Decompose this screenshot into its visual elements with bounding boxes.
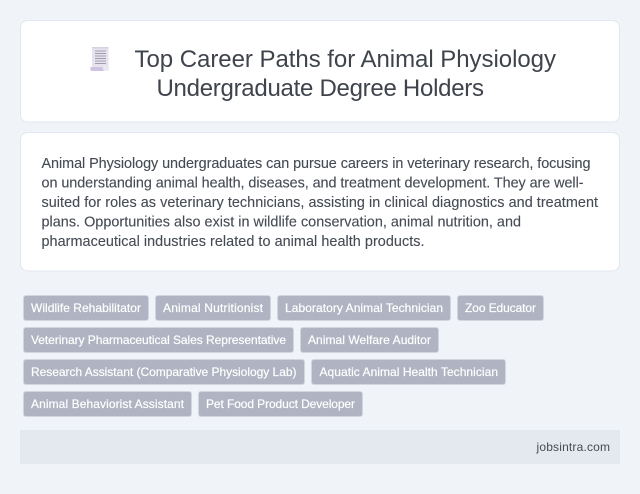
tag: Aquatic Animal Health Technician: Aquatic Animal Health Technician <box>320 365 498 379</box>
tag: Laboratory Animal Technician <box>278 296 450 320</box>
tag: Animal Behaviorist Assistant: Animal Behaviorist Assistant <box>31 397 185 411</box>
tag: Zoo Educator <box>458 296 544 320</box>
description text: suited for roles as veterinary technicians, assisting in clinical diagnostics and treatment <box>42 195 598 211</box>
footer source text: jobsintra.com <box>536 440 610 454</box>
tag: Zoo Educator: Zoo Educator <box>465 301 536 315</box>
tag: Veterinary Pharmaceutical Sales Representative <box>24 328 294 352</box>
header panel <box>20 20 620 122</box>
tag: Wildlife Rehabilitator: Wildlife Rehabilitator <box>31 301 141 315</box>
description text: on understanding animal health, diseases, and treatment development. They are well- <box>42 176 584 192</box>
tag: Research Assistant (Comparative Physiology Lab) <box>24 360 304 384</box>
tag: Veterinary Pharmaceutical Sales Representative: Veterinary Pharmaceutical Sales Representative <box>31 333 286 347</box>
footer bar <box>20 430 620 464</box>
tag: Wildlife Rehabilitator <box>24 296 148 320</box>
tag: Research Assistant (Comparative Physiology Lab): Research Assistant (Comparative Physiology Lab) <box>31 365 296 379</box>
title: Top Career Paths for Animal Physiology <box>134 46 556 73</box>
tag: Pet Food Product Developer <box>198 392 362 416</box>
career tags <box>24 296 544 416</box>
tag: Animal Behaviorist Assistant <box>24 392 192 416</box>
tag: Animal Nutritionist: Animal Nutritionist <box>163 301 264 315</box>
icon: paper scroll document <box>90 47 109 71</box>
tag: Aquatic Animal Health Technician <box>312 360 506 384</box>
description text <box>42 156 598 250</box>
tag: Animal Welfare Auditor <box>300 328 438 352</box>
title <box>134 46 556 102</box>
title: Undergraduate Degree Holders <box>156 75 484 102</box>
tag: Animal Nutritionist <box>156 296 270 320</box>
tag: Animal Welfare Auditor: Animal Welfare Auditor <box>308 333 431 347</box>
description text: plans. Opportunities also exist in wildlife conservation, animal nutrition, and <box>42 215 521 231</box>
description panel <box>20 132 620 271</box>
description text: Animal Physiology undergraduates can pursue careers in veterinary research, focusing <box>42 156 590 172</box>
tag: Laboratory Animal Technician: Laboratory Animal Technician <box>285 301 443 315</box>
tag: Pet Food Product Developer: Pet Food Product Developer <box>206 397 355 411</box>
description text: pharmaceutical industries related to animal health products. <box>42 234 424 250</box>
